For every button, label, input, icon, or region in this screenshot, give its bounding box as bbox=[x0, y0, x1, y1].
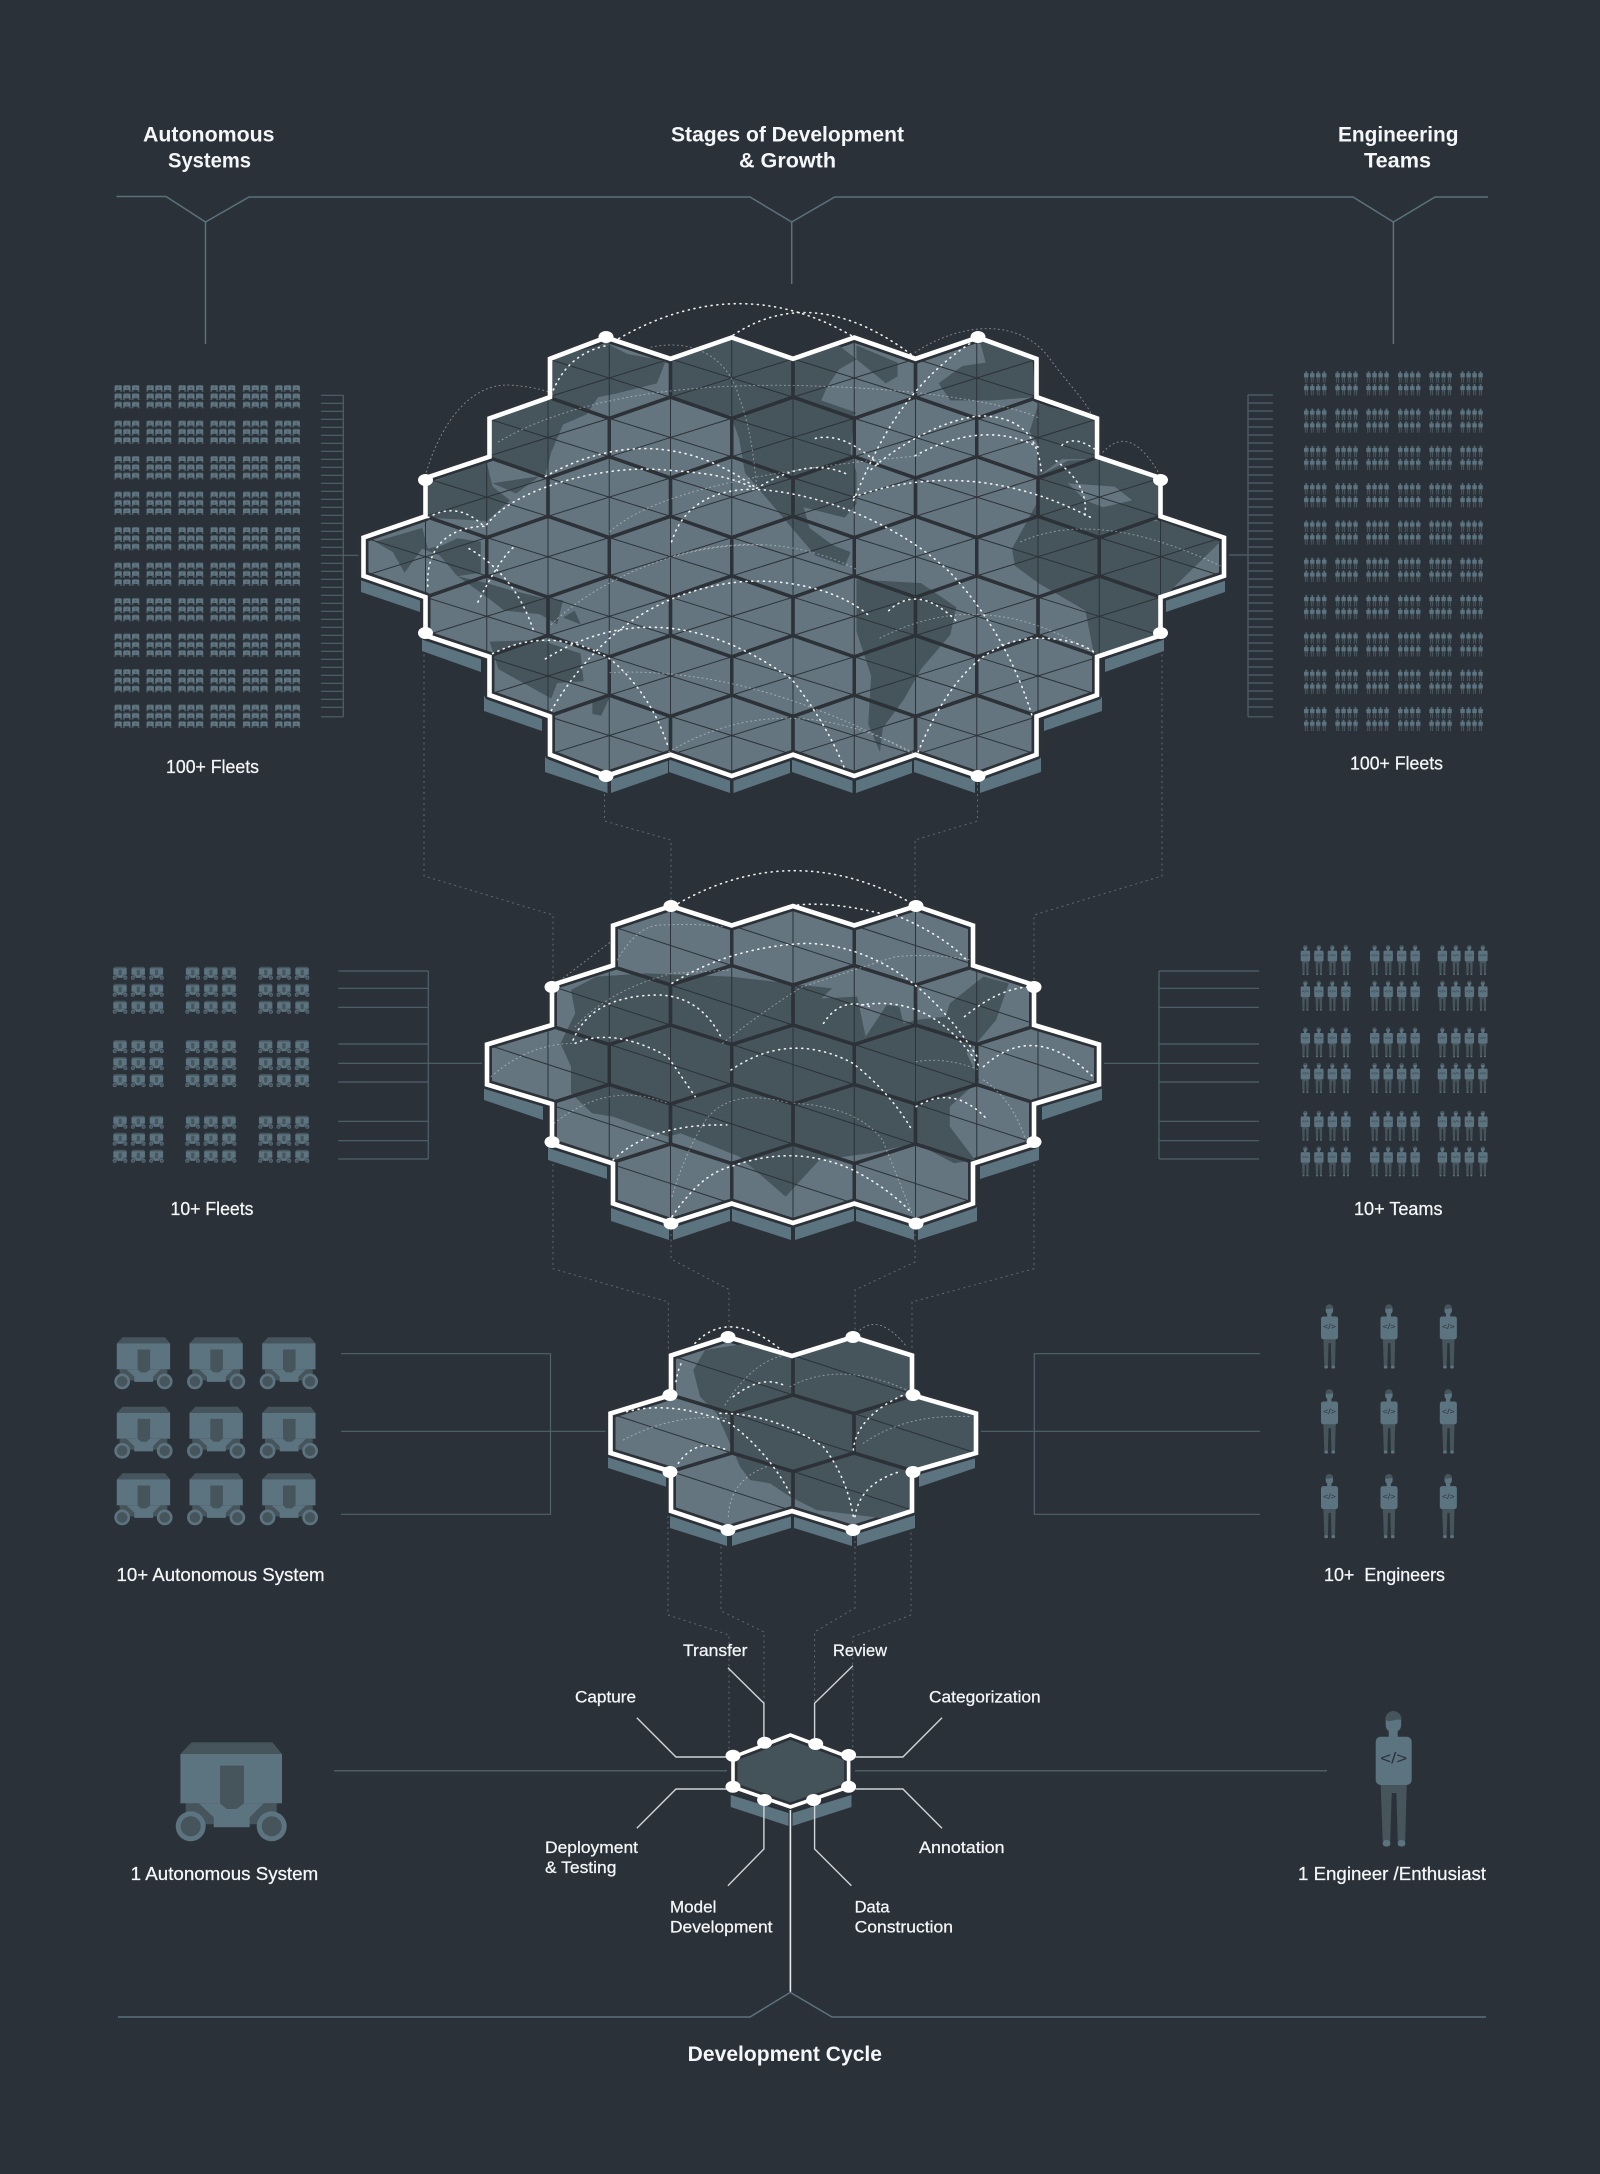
bracket: teams to mid platform bbox=[1100, 971, 1259, 1159]
hexagon cells bbox=[487, 906, 1099, 1223]
bracket: engineers to small platform bbox=[975, 1354, 1260, 1514]
platform nodes bbox=[544, 900, 1042, 1230]
bottom bracket bbox=[118, 1992, 1486, 2017]
platform white outline bbox=[364, 338, 1224, 776]
stage labels: Deployment bbox=[545, 1839, 638, 1857]
heading: autonomous systems: Systems bbox=[168, 150, 251, 172]
label: 1 engineer / enthusiast: 1 Engineer /Enthusiast bbox=[1298, 1864, 1486, 1884]
label: 10+ fleets: 10+ Fleets bbox=[170, 1199, 254, 1219]
label: 100+ fleets right: 100+ Fleets bbox=[1350, 754, 1443, 774]
label: 10+ autonomous system: 10+ Autonomous System bbox=[116, 1565, 324, 1585]
heading: stages of development and growth: & Growth bbox=[739, 150, 836, 172]
dotted connectors between the hex platforms bbox=[424, 638, 1162, 1755]
stage labels: & Testing bbox=[545, 1859, 616, 1877]
hub nodes bbox=[726, 1737, 856, 1806]
small hex platform: local scale bbox=[608, 1324, 983, 1546]
team grid: 10+ teams bbox=[1301, 945, 1488, 1176]
platform surface bbox=[610, 1337, 976, 1530]
bracket: robots to small platform bbox=[341, 1354, 612, 1514]
stage labels: Development bbox=[670, 1919, 773, 1937]
heading: development cycle: Development Cycle bbox=[688, 2043, 882, 2066]
heading: engineering teams bbox=[1338, 124, 1458, 172]
fleet grid: 10+ fleets bbox=[113, 967, 309, 1163]
label: 10+ engineers: 10+ Engineers bbox=[1324, 1565, 1445, 1585]
label: 100+ fleets left: 100+ Fleets bbox=[166, 757, 259, 777]
top bracket connecting the three headings bbox=[116, 196, 1488, 344]
bracket: fleets to mid platform bbox=[338, 971, 487, 1159]
stage labels: Capture bbox=[575, 1689, 636, 1707]
coastline land bbox=[693, 1337, 983, 1523]
line: system to development cycle to engineer bbox=[334, 1770, 1327, 1772]
large hex platform: global scale bbox=[361, 304, 1225, 793]
dotted network arcs bbox=[623, 1324, 970, 1517]
hub side bands bbox=[731, 1795, 852, 1826]
heading: stages of development and growth bbox=[671, 124, 904, 172]
stage labels: Model bbox=[670, 1899, 716, 1917]
icon: single engineer bbox=[1376, 1711, 1412, 1846]
world map land bbox=[375, 339, 1220, 752]
development cycle hub bbox=[545, 1642, 1041, 1937]
platform side bands bbox=[361, 577, 1225, 793]
platform side bands bbox=[608, 1454, 975, 1546]
stage labels bbox=[545, 1642, 1041, 1937]
heading: engineering teams: Teams bbox=[1364, 150, 1431, 172]
stage labels: Construction bbox=[855, 1919, 953, 1937]
engineering teams grid: 100+ fleets bbox=[1304, 371, 1483, 731]
hub hexagon bbox=[733, 1735, 849, 1807]
label: 1 autonomous system: 1 Autonomous System bbox=[131, 1864, 318, 1884]
dotted network arcs bbox=[425, 304, 1220, 769]
hexagon cells bbox=[610, 1337, 976, 1530]
stage labels: Annotation bbox=[919, 1839, 1005, 1857]
heading: autonomous systems bbox=[143, 124, 274, 172]
stage labels: Categorization bbox=[929, 1689, 1041, 1707]
stage labels: Transfer bbox=[683, 1642, 748, 1660]
ladder bracket left bbox=[321, 395, 365, 717]
ladder bracket right bbox=[1227, 395, 1273, 717]
stage labels: Review bbox=[833, 1642, 887, 1660]
autonomous systems fleet grid: 100+ fleets bbox=[114, 385, 300, 728]
platform surface bbox=[487, 906, 1099, 1223]
platform white outline bbox=[610, 1337, 976, 1530]
stage labels: Data bbox=[855, 1899, 890, 1917]
stage leader lines bbox=[637, 1666, 942, 1886]
line: hub to bottom bracket bbox=[789, 1810, 791, 1992]
heading: autonomous systems: Autonomous bbox=[143, 124, 274, 146]
medium hex platform: regional scale bbox=[484, 871, 1102, 1240]
icon: single autonomous system bbox=[176, 1742, 287, 1841]
platform surface bbox=[364, 338, 1224, 776]
hexagon cells bbox=[364, 338, 1222, 776]
continent land bbox=[560, 973, 1009, 1197]
dotted network arcs bbox=[491, 871, 1093, 1217]
platform nodes bbox=[662, 1331, 920, 1536]
platform nodes bbox=[418, 331, 1168, 782]
platform white outline bbox=[487, 906, 1099, 1223]
engineer group: 10+ engineers bbox=[1321, 1304, 1457, 1538]
heading: stages of development and growth: Stages of Development bbox=[671, 124, 904, 146]
heading: engineering teams: Engineering bbox=[1338, 124, 1458, 146]
robot group: 10+ autonomous system bbox=[114, 1337, 318, 1525]
label: 10+ teams: 10+ Teams bbox=[1354, 1199, 1442, 1219]
platform side bands bbox=[484, 1085, 1102, 1240]
